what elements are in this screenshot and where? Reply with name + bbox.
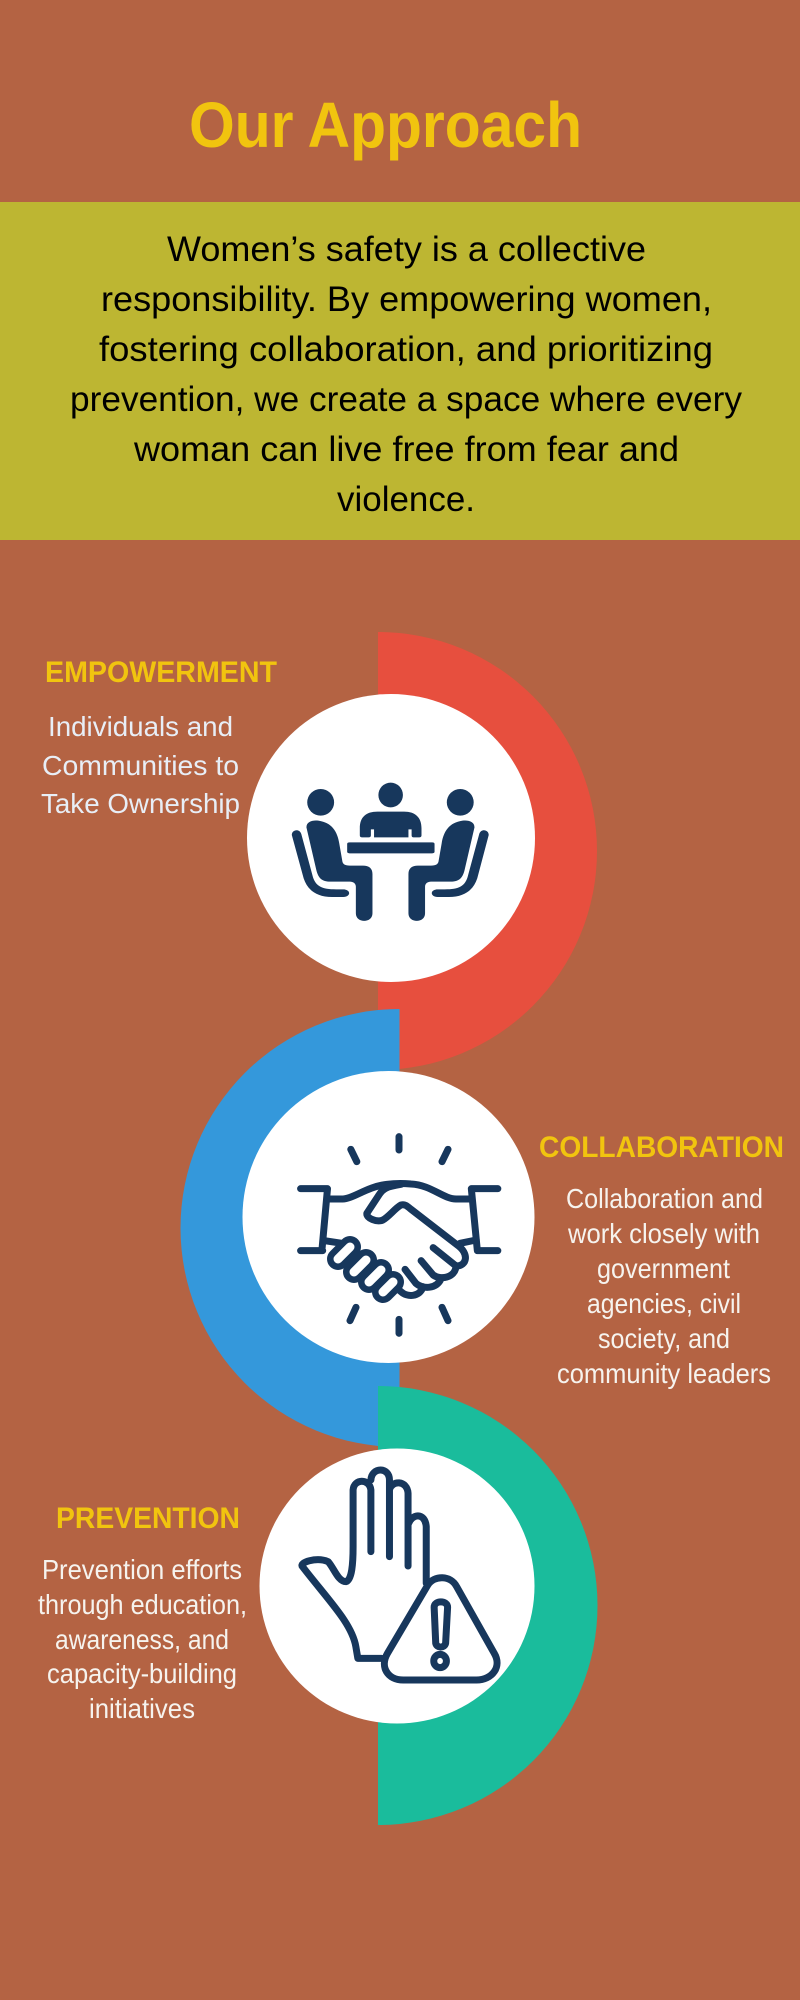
half disc: red [378,632,597,1070]
intro text: fostering collaboration, and prioritizing [99,329,713,369]
label: empowerment: EMPOWERMENT [45,656,277,689]
icon: handshake [301,1137,498,1333]
label: prevention: PREVENTION [56,1502,240,1535]
intro text: violence. [337,479,475,519]
white circle: collaboration [242,1071,534,1363]
label: collaboration: work closely with [567,1218,760,1249]
label: empowerment: Communities to [42,750,239,781]
icon: people at table [292,783,489,921]
half disc: blue [180,1009,400,1447]
label: prevention: through education, [38,1589,247,1620]
label: collaboration: government [597,1253,730,1284]
intro text [70,229,742,519]
intro text: Women’s safety is a collective [167,229,646,269]
label: empowerment [41,656,277,819]
panel: intro band [0,202,800,540]
intro text: prevention, we create a space where every [70,379,742,419]
label: prevention: initiatives [89,1693,195,1724]
white circle: prevention [260,1448,534,1724]
label: collaboration: COLLABORATION [539,1131,784,1164]
icon: stop hand with warning triangle [302,1470,497,1680]
label: collaboration [539,1131,784,1389]
label: collaboration: society, and [598,1323,730,1354]
label: empowerment: Individuals and [48,711,233,742]
intro text: woman can live free from fear and [133,429,679,469]
label: collaboration: agencies, civil [587,1288,741,1319]
label: prevention: capacity-building [47,1658,237,1689]
intro text: responsibility. By empowering women, [101,279,712,319]
label: prevention: Prevention efforts [42,1554,242,1585]
title: Our Approach [189,89,582,161]
label: prevention: awareness, and [55,1624,229,1655]
label: prevention [38,1502,247,1724]
label: empowerment: Take Ownership [41,788,240,819]
label: collaboration: community leaders [557,1358,771,1389]
label: collaboration: Collaboration and [566,1183,763,1214]
half disc: green [378,1386,598,1825]
white circle: empowerment [247,694,535,982]
